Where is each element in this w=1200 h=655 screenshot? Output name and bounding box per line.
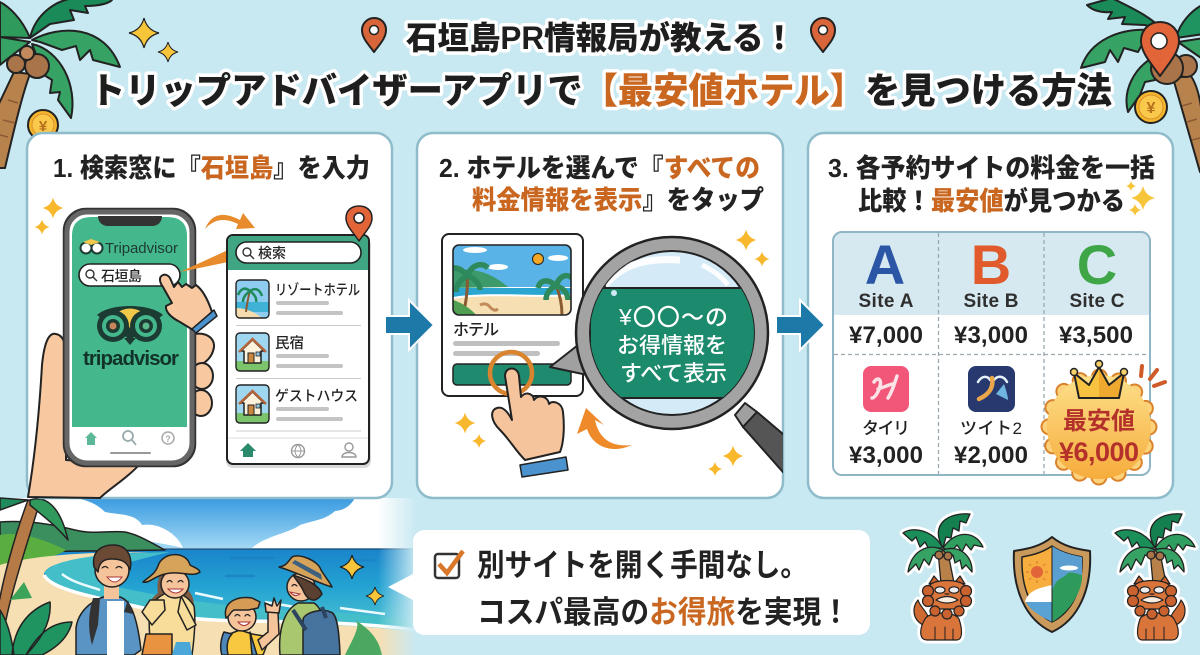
icon: sparkles — [34, 198, 64, 234]
emblem: shield — [1014, 537, 1090, 632]
person: father — [76, 545, 141, 655]
column: Site B: B — [971, 233, 1011, 296]
magnifier text: すべて表示 — [620, 361, 727, 386]
list item: resort hotel — [236, 280, 360, 318]
app screen — [226, 235, 371, 468]
panel: step 3 — [808, 133, 1173, 498]
hotel card — [442, 234, 583, 396]
list item: resort hotel: リゾートホテル — [275, 282, 360, 299]
heading: step 1: 1. 検索窓に『石垣島』を入力 — [53, 153, 370, 183]
icon: title pin left — [362, 18, 386, 52]
phone nav — [85, 431, 174, 454]
icon: title pin right — [811, 18, 835, 52]
app search: 検索 — [258, 245, 286, 261]
search box — [79, 264, 180, 286]
column: ツイト2: ¥2,000 — [954, 442, 1028, 469]
column: Site B — [954, 233, 1028, 349]
icon: accent rays — [1141, 366, 1165, 386]
title — [90, 18, 1112, 111]
logo: small tripadvisor: Tripadvisor — [105, 240, 178, 257]
arrow: curved orange — [577, 408, 632, 449]
phone nav: ? — [165, 434, 171, 444]
logo: owl — [97, 306, 163, 345]
right palm tree — [1081, 0, 1200, 175]
hotel photo — [448, 245, 572, 315]
pointer hand — [160, 275, 217, 333]
column: タイリ: タイリ — [862, 419, 910, 438]
heading: step 2: 料金情報を表示』をタップ — [472, 185, 764, 215]
icon: coin left: ¥ — [39, 118, 48, 135]
column: Site A: ¥7,000 — [849, 322, 923, 349]
column: Site A: Site A — [858, 291, 914, 312]
icon: sparkles — [454, 230, 770, 476]
search box: 石垣島 — [101, 268, 142, 284]
illustration: beach scene with family — [0, 498, 416, 655]
hotel card: ホテル — [453, 322, 499, 339]
heading: step 3 — [828, 153, 1155, 216]
heading: step 3: 3. 各予約サイトの料金を一括 — [828, 153, 1155, 183]
app nav — [240, 443, 356, 458]
callout wedge — [180, 250, 228, 272]
column: タイリ: ¥3,000 — [849, 442, 923, 469]
column: Site A: A — [865, 233, 905, 296]
magnifier — [550, 237, 790, 480]
column: ツイト2: ツイト2 — [960, 419, 1022, 438]
column: ツイト2 — [954, 366, 1028, 469]
person: child — [221, 598, 281, 655]
icon: coin right — [1135, 91, 1167, 123]
icon: title sparkles — [129, 18, 178, 62]
column: Site B: ¥3,000 — [954, 322, 1028, 349]
heading: step 2 — [439, 153, 764, 215]
column: Site B: Site B — [964, 291, 1018, 312]
column: Site C — [1059, 233, 1133, 349]
column: Site C: C — [1077, 233, 1117, 296]
panel: step 2 — [417, 133, 790, 498]
title: 石垣島PR情報局が教える！ — [406, 20, 795, 56]
arrow: step 1 to 2 — [385, 300, 434, 350]
icon: coin right: ¥ — [1147, 100, 1156, 117]
column: Site C: ¥3,500 — [1059, 322, 1133, 349]
icon: holding hand — [28, 334, 214, 498]
text: summary: コスパ最高のお得旅を実現！ — [477, 595, 850, 630]
comparison table — [833, 232, 1150, 475]
column: タイリ — [849, 366, 923, 469]
magnifier text: ¥〇〇～の — [618, 304, 728, 330]
icon: scene sparkles — [340, 555, 384, 605]
callout: summary — [388, 530, 870, 635]
column: Site A — [849, 233, 923, 349]
text: summary — [477, 548, 850, 630]
magnifier text — [617, 304, 728, 386]
person: mother — [142, 555, 200, 655]
badge: lowest price: ¥6,000 — [1059, 437, 1139, 467]
icon: coin left — [28, 110, 58, 140]
list item: minshuku: 民宿 — [275, 335, 304, 352]
badge: lowest price: 最安値 — [1063, 408, 1135, 435]
list item: minshuku — [236, 333, 343, 371]
panel: step 1 — [27, 133, 392, 498]
logo: tripadvisor wordmark: tripadvisor — [83, 347, 179, 370]
badge: lowest price — [1047, 360, 1165, 479]
text: summary: 別サイトを開く手間なし。 — [477, 548, 808, 583]
list item: guest house: ゲストハウス — [275, 388, 358, 405]
icon: crown — [1070, 360, 1128, 398]
phone — [64, 209, 195, 466]
heading: step 3: 比較！最安値が見つかる — [858, 186, 1125, 216]
heading: step 2: 2. ホテルを選んで『すべての — [439, 153, 760, 183]
column: Site C: Site C — [1070, 291, 1125, 312]
tapping hand — [492, 368, 568, 477]
left palm tree — [0, 0, 120, 168]
icon: map pin — [346, 206, 372, 241]
arrow: curved orange — [205, 213, 255, 229]
icon: sparkles — [1126, 181, 1155, 216]
icon: checkbox — [435, 551, 463, 578]
mascot: shisa and palm right — [1115, 514, 1195, 640]
person: father with backpack — [279, 556, 340, 655]
mascot: shisa and palm left — [903, 514, 983, 640]
list item: guest house — [236, 385, 358, 423]
arrow: step 2 to 3 — [776, 300, 825, 350]
icon: right pin — [1141, 22, 1179, 76]
title: トリップアドバイザーアプリで【最安値ホテル】を見つける方法 — [90, 70, 1112, 111]
app search — [236, 242, 361, 263]
magnifier text: お得情報を — [617, 333, 727, 358]
